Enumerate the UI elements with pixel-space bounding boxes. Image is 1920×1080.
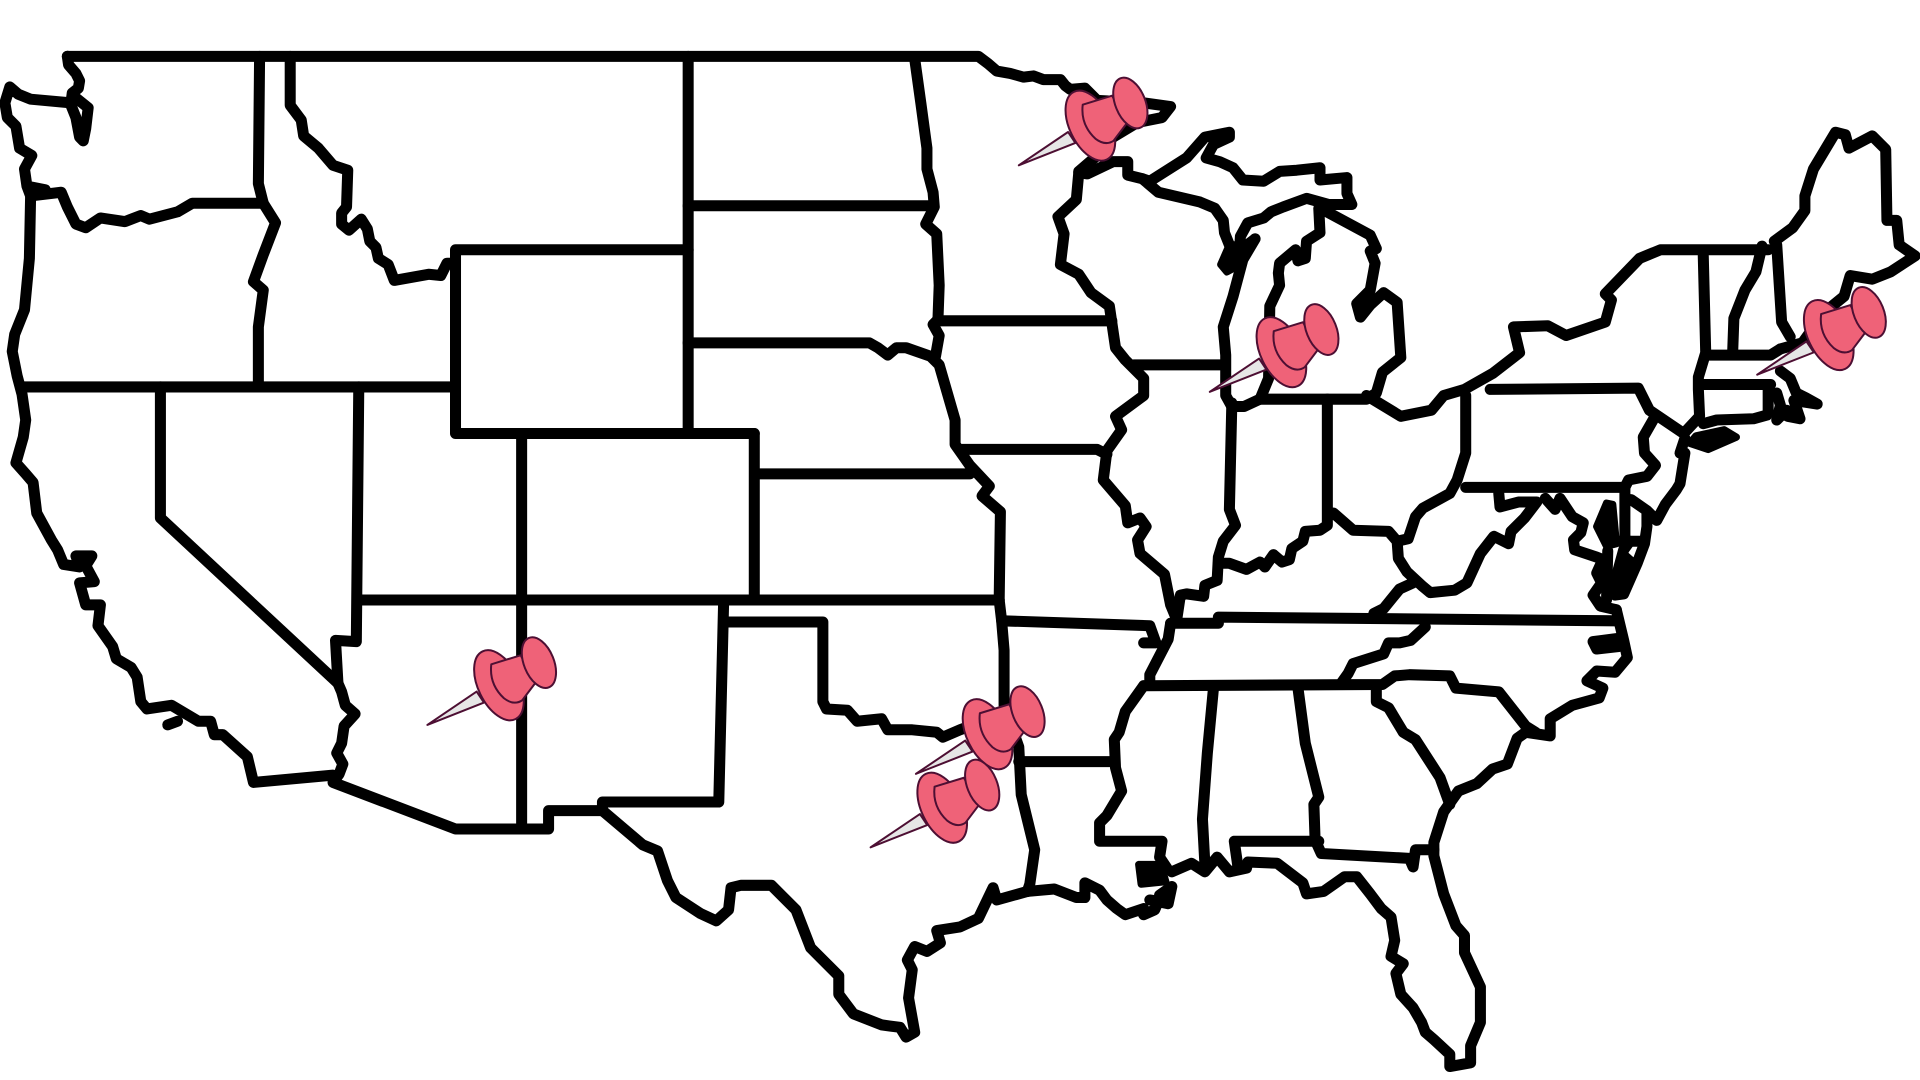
Arkansas and Louisiana border [1019, 757, 1113, 766]
Dakota east border [915, 59, 939, 356]
needle [1210, 359, 1266, 392]
cap [1845, 282, 1893, 343]
pin: New England [1757, 282, 1893, 378]
body [1821, 305, 1865, 352]
cap [1106, 73, 1154, 133]
needle [427, 692, 484, 725]
Puget Sound [71, 98, 88, 141]
body [491, 655, 536, 703]
Oklahoma and Texas north [725, 600, 1035, 891]
Pamlico Sound [1593, 638, 1621, 649]
Columbia river and Oregon north border [31, 192, 263, 228]
Upper Peninsula of Michigan [1142, 132, 1352, 257]
Dakota vertical [684, 56, 693, 433]
pin: Oklahoma and Arkansas [916, 681, 1051, 777]
cap [1004, 681, 1051, 742]
base disc [907, 765, 977, 851]
Chesapeake blob [1597, 503, 1616, 546]
Missouri south [1002, 621, 1171, 684]
Rhode Island and Cape Cod [1777, 371, 1817, 420]
cap [958, 755, 1006, 815]
Montana and Idaho border [290, 56, 456, 280]
Delmarva lower fill [1616, 553, 1635, 593]
Wisconsin and Illinois border [1134, 360, 1223, 369]
Michigan border west [1232, 399, 1260, 407]
base disc [1794, 292, 1864, 378]
Tennessee north border [1171, 617, 1616, 623]
body [1273, 322, 1318, 370]
Alabama and Georgia [1298, 688, 1434, 867]
parallel 42 border [22, 382, 456, 391]
Lower Michigan [1260, 208, 1401, 399]
Nevada [160, 387, 338, 683]
Green Bay blob [1221, 238, 1254, 272]
New Jersey and Delaware Bay [1615, 453, 1685, 595]
Tennessee and North Carolina [1342, 627, 1425, 682]
Tennessee south border [1144, 675, 1536, 732]
Ohio river [1218, 399, 1537, 593]
Wyoming box [456, 250, 754, 433]
Alabama and Mississippi [1202, 688, 1213, 864]
Kentucky and Virginia [1374, 583, 1413, 613]
needle [916, 741, 973, 774]
Delmarva west line [1607, 551, 1608, 600]
Chesapeake west shore [1545, 498, 1616, 610]
Texas coast [602, 811, 1027, 1037]
Massachusetts and Connecticut [1702, 349, 1780, 424]
Wisconsin north shore [1079, 162, 1229, 245]
Iowa borders [937, 321, 1112, 454]
Pacific coast [5, 56, 333, 782]
base disc [1055, 83, 1125, 169]
cap [515, 632, 563, 693]
Long Island [1690, 430, 1736, 449]
Colorado east and Nebraska south [754, 433, 970, 600]
Ohio east and Pennsylvania [1397, 396, 1466, 541]
needle [1757, 341, 1814, 375]
pin: Arizona and New Mexico [427, 632, 563, 728]
body [980, 704, 1024, 752]
pin: Michigan [1210, 299, 1345, 395]
Great Lakes shore and New York north [1367, 250, 1768, 416]
body [934, 778, 979, 825]
Maine [1774, 132, 1915, 349]
parallel 37 border [359, 596, 999, 604]
New Hampshire and Maine border [1777, 245, 1790, 337]
pin: Minnesota [1019, 73, 1154, 169]
Pennsylvania box [1466, 388, 1684, 487]
North and South Dakota border [688, 201, 933, 210]
Four corners vertical [517, 433, 526, 829]
New York east border [1684, 256, 1706, 433]
South Dakota and Nebraska border [688, 343, 1000, 600]
needle [1019, 132, 1075, 165]
New Mexico east [602, 600, 724, 811]
Delaware and Maryland lines [1613, 486, 1642, 541]
Utah and Arizona west [333, 387, 602, 829]
base disc [1246, 309, 1316, 395]
pin: north Texas [871, 755, 1006, 851]
cap [1297, 299, 1345, 360]
base disc [464, 642, 534, 728]
Hudson mouth [1680, 438, 1685, 453]
body [1082, 96, 1127, 143]
Mississippi delta blob [1139, 864, 1166, 884]
base disc [952, 691, 1023, 777]
Gulf coast to Florida [1172, 610, 1627, 1067]
Idaho borders [253, 56, 276, 387]
California island [168, 721, 178, 725]
Illinois and Indiana [1177, 403, 1236, 620]
northern border and Minnesota shore [67, 56, 1171, 171]
Lake Michigan west shore [1223, 239, 1255, 407]
Mississippi river south [1100, 686, 1167, 868]
Vermont and New Hampshire [1733, 246, 1762, 353]
Gulf coast Louisiana [1027, 883, 1172, 915]
Wisconsin west and Mississippi [1058, 173, 1177, 620]
Florida panhandle [1234, 841, 1319, 867]
Georgia and South Carolina [1376, 688, 1450, 804]
needle [871, 814, 927, 847]
